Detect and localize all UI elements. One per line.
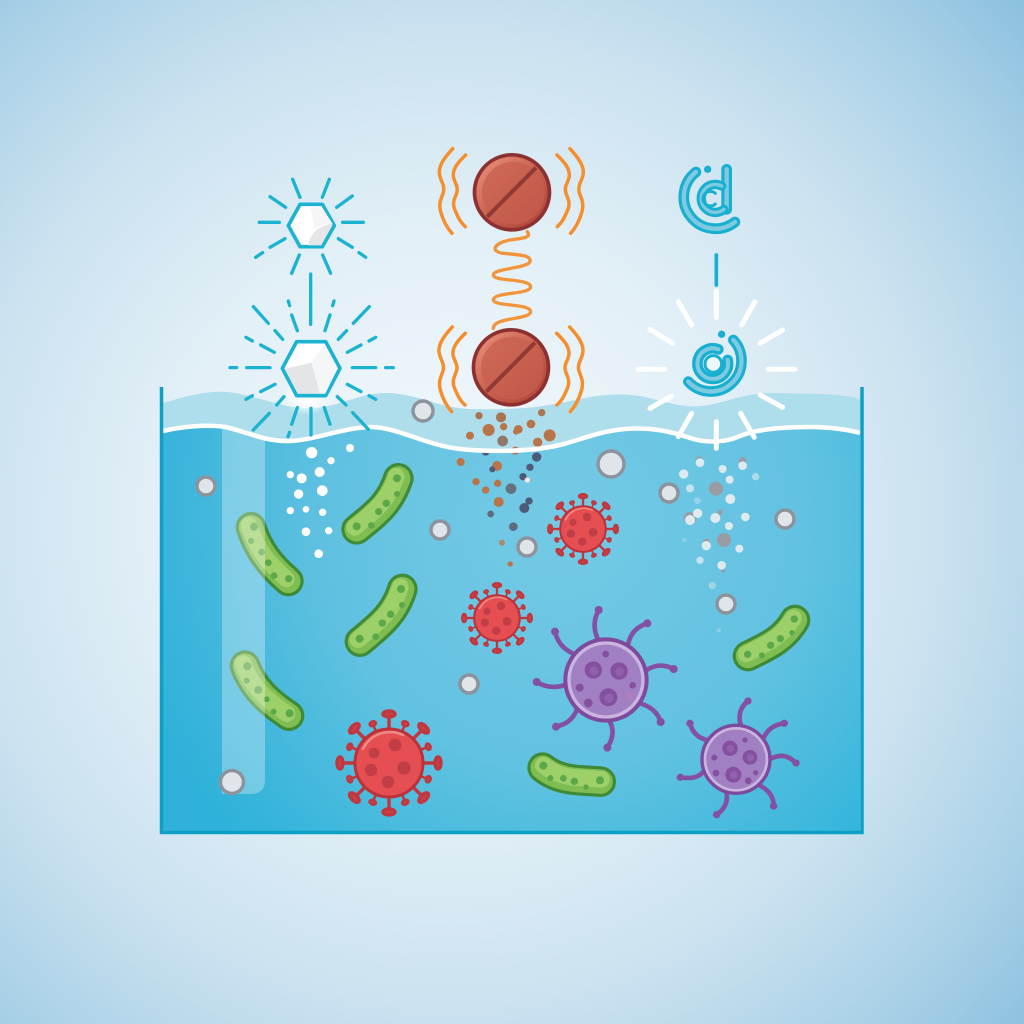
glass highlight column (222, 427, 265, 794)
connector line (711, 255, 722, 285)
bacterium 6 (744, 615, 798, 658)
water left shading (163, 426, 400, 832)
connector line (306, 274, 316, 324)
brown and dark dissolved particles (457, 409, 556, 567)
air bubbles (197, 401, 794, 794)
white rays (638, 291, 795, 448)
bacteria and microbes on the right (533, 606, 800, 818)
large purple microbe (533, 606, 678, 752)
bacterium 1 (248, 523, 292, 582)
column 2: vibrating tablets (439, 149, 583, 412)
column 3: curled ions (638, 166, 795, 448)
column 1: sugar crystals (230, 179, 393, 437)
virus large (337, 711, 441, 815)
back water surface (163, 392, 860, 470)
tank walls (162, 387, 862, 832)
bacterium 3 (356, 585, 405, 643)
spring (493, 232, 531, 328)
icon: lower curl (688, 331, 741, 391)
virus upper right (548, 494, 618, 564)
virus middle (462, 583, 532, 653)
top vibration lines (439, 149, 583, 233)
bottom tablet (472, 328, 550, 407)
small purple microbe (677, 697, 800, 818)
icon: small crystal with rays (256, 179, 366, 273)
water body (163, 426, 860, 832)
top tablet (473, 153, 551, 232)
white dissolved particles (287, 444, 354, 558)
grey dissolved particles (679, 455, 759, 632)
bacterium 5 (539, 762, 604, 790)
bacteria in left column (243, 474, 405, 717)
icon: upper curl (684, 166, 735, 229)
icon: large crystal with rays (230, 301, 393, 437)
bacterium 4 (243, 662, 294, 717)
water surface line (163, 426, 860, 451)
bacterium 2 (353, 474, 401, 530)
bottom vibration lines (439, 327, 583, 412)
